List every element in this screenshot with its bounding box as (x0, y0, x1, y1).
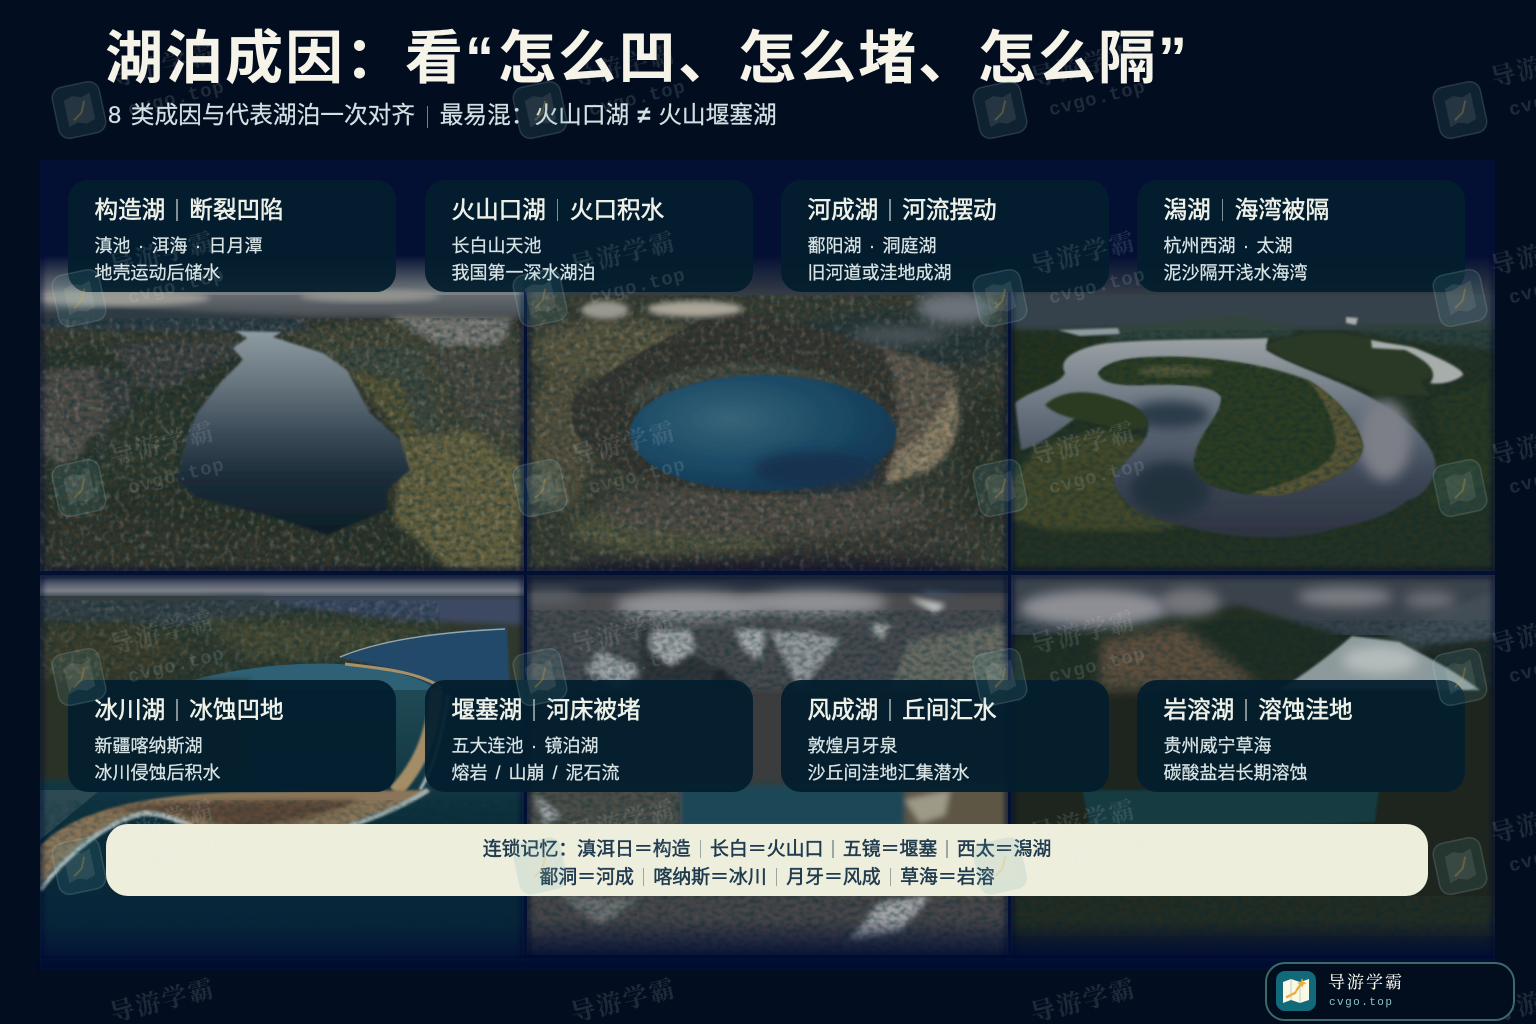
card: 潟湖: 杭州西湖 太湖 (1164, 236, 1292, 256)
card: 火山口湖: 我国第一深水湖泊 (452, 262, 596, 282)
card: 构造湖: · (138, 236, 144, 256)
brand badge: cvgo.top (1329, 997, 1393, 1009)
card: 岩溶湖: 贵州威宁草海 (1164, 736, 1272, 756)
card: 潟湖: 潟湖 海湾被隔 (1164, 198, 1329, 224)
title: 湖泊成因：看“怎么凹、怎么堵、怎么隔” (105, 26, 1187, 91)
card: 风成湖: 风成湖 丘间汇水 (808, 698, 997, 724)
panel 3 image: river meander lake (1011, 262, 1495, 571)
card: 构造湖: 滇池 洱海 日月潭 (94, 236, 262, 256)
panel 2 image: crater lake (527, 240, 1015, 577)
card: 构造湖: 地壳运动后储水 (94, 262, 220, 282)
subtitle: 8 类成因与代表湖泊一次对齐 最易混：火山口湖 火山堰塞湖 (108, 103, 777, 129)
card: 堰塞湖: 五大连池 镜泊湖 (452, 736, 598, 756)
card: 风成湖: 敦煌月牙泉 (808, 736, 898, 756)
brand badge (1265, 962, 1515, 1021)
card: 潟湖: · (1243, 236, 1249, 256)
card: 堰塞湖: 熔岩 山崩 泥石流 (452, 762, 620, 782)
card: 河成湖: 鄱阳湖 洞庭湖 (808, 236, 936, 256)
card: 火山口湖: 火山口湖 火口积水 (452, 198, 664, 224)
card: 河成湖: · (869, 236, 875, 256)
card: 潟湖: 泥沙隔开浅水海湾 (1164, 262, 1308, 282)
card: 堰塞湖: / (552, 762, 558, 782)
brand badge: 导游学霸 (1328, 968, 1404, 993)
card: 堰塞湖: / (495, 762, 500, 782)
card: 风成湖: 沙丘间洼地汇集潜水 (808, 762, 970, 782)
memory strip: 鄱洞＝河成 喀纳斯＝冰川 月牙＝风成 草海＝岩溶 (539, 867, 995, 888)
card: 风成湖 (781, 680, 1108, 792)
panel 1 image: rift lake (40, 258, 524, 571)
card: 火山口湖 (425, 180, 752, 292)
panel 6 image: karst lake forest (1011, 575, 1495, 970)
card: 岩溶湖: 碳酸盐岩长期溶蚀 (1164, 762, 1308, 782)
card: 潟湖 (1137, 180, 1464, 292)
panel 4 image: coastal glacial lake (30, 575, 524, 970)
photo collage background (40, 160, 1496, 970)
card: 河成湖 (781, 180, 1108, 292)
card: 火山口湖: 长白山天池 (452, 236, 542, 256)
card: 冰川湖: 冰川侵蚀后积水 (94, 762, 220, 782)
icon: folded map (1276, 971, 1316, 1011)
panel 5 image: barrier lake valley (520, 575, 1008, 970)
card: 构造湖: 构造湖 断裂凹陷 (94, 198, 284, 224)
card: 冰川湖 (68, 680, 396, 792)
card: 堰塞湖: 堰塞湖 河床被堵 (452, 698, 641, 724)
card: 冰川湖: 新疆喀纳斯湖 (94, 736, 202, 756)
subtitle: ≠ (637, 103, 650, 129)
memory strip: 连锁记忆：滇洱日＝构造 长白＝火山口 五镜＝堰塞 西太＝潟湖 (483, 839, 1051, 860)
card: 岩溶湖: 岩溶湖 溶蚀洼地 (1164, 698, 1353, 724)
card: 河成湖: 旧河道或洼地成湖 (808, 262, 952, 282)
card: 堰塞湖: · (531, 736, 537, 756)
card: 堰塞湖 (425, 680, 752, 792)
card: 河成湖: 河成湖 河流摆动 (808, 198, 997, 224)
card: 岩溶湖 (1137, 680, 1464, 792)
card: 冰川湖: 冰川湖 冰蚀凹地 (94, 698, 284, 724)
memory strip (106, 824, 1428, 896)
card: 构造湖 (68, 180, 396, 292)
card: 构造湖: · (195, 236, 201, 256)
